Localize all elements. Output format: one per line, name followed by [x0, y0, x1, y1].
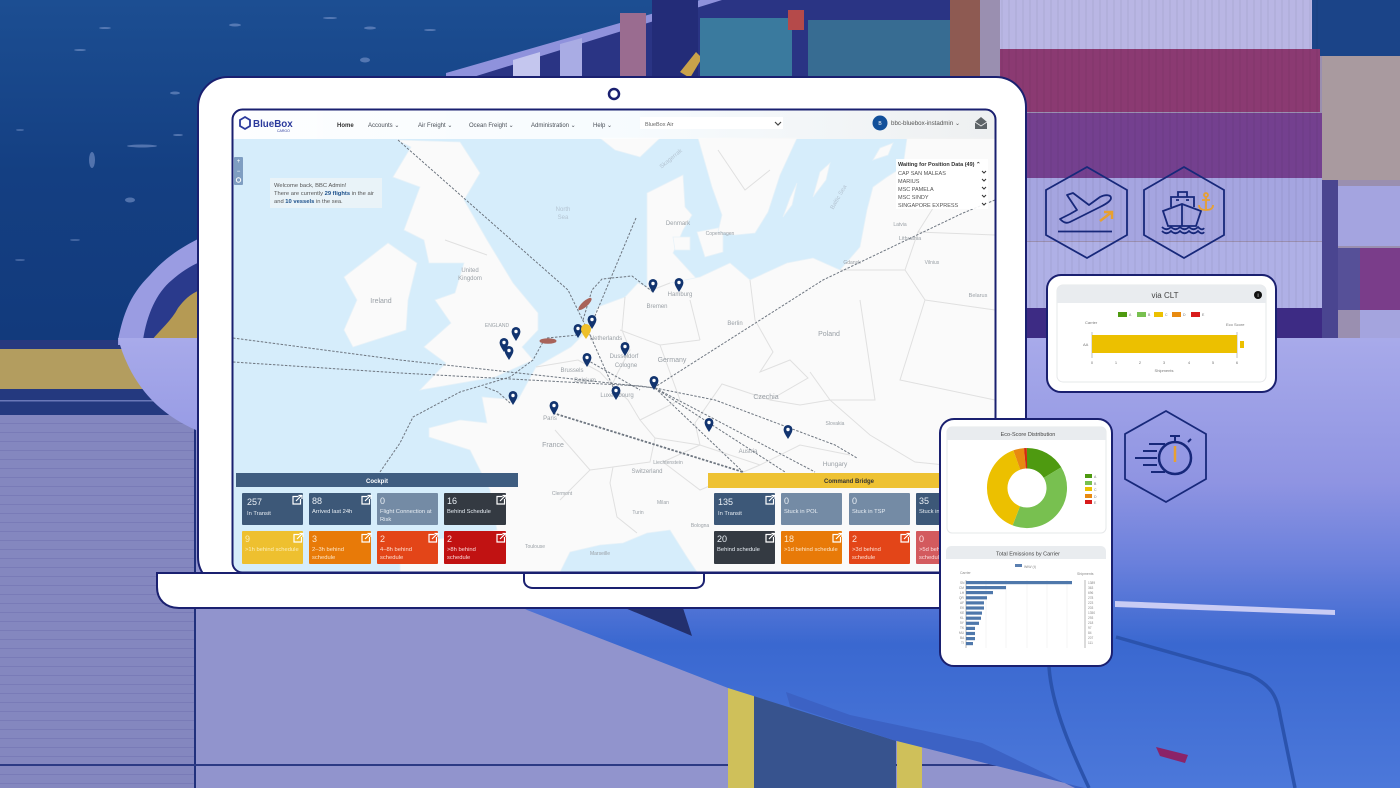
map place labels: Slovakia: [826, 421, 845, 427]
map place labels: Denmark: [666, 221, 691, 227]
donut legend: B: [1094, 482, 1097, 486]
map place labels: Skagerrak: [659, 148, 685, 170]
logo: [240, 117, 293, 133]
waiting list: MARIUS: [898, 179, 920, 185]
cockpit cards: 16: [447, 496, 457, 506]
chart bars and axis: [1083, 320, 1245, 373]
card: tablet with charts: [940, 419, 1112, 666]
emissions bar chart: 278: [1088, 596, 1094, 600]
map place labels: Austria: [739, 449, 758, 455]
cockpit panel: [236, 473, 518, 564]
laptop camera: [609, 89, 619, 99]
donut chart: [997, 458, 1057, 518]
emissions bar chart: 207: [1088, 636, 1094, 640]
map place labels: Baltic Sea: [830, 184, 849, 211]
donut legend: A: [1094, 475, 1097, 479]
emissions bar chart: KL: [960, 616, 964, 620]
cockpit cards: Flight Connection at: [380, 509, 432, 515]
chart legend: A: [1129, 313, 1132, 317]
cockpit cards: 3: [312, 534, 317, 544]
map place labels: Kingdom: [458, 276, 482, 282]
chart header: via CLT: [1152, 291, 1179, 300]
map routes: [233, 140, 995, 472]
chart bars and axis: AA: [1083, 342, 1089, 347]
chart bars and axis: Carrier: [1085, 320, 1098, 325]
menu items: Help ⌄: [593, 123, 612, 129]
chart bars and axis: 4: [1188, 360, 1191, 365]
emissions bar chart: CM: [959, 586, 964, 590]
map place labels: [370, 148, 988, 557]
cockpit cards: >1h behind schedule: [245, 547, 299, 553]
chart bars and axis: Eco Score: [1226, 322, 1245, 327]
command bridge cards: >5d behind: [919, 547, 948, 553]
command bridge cards: 2: [852, 534, 857, 544]
background: dock edge: [0, 340, 200, 416]
command bridge cards: Stuck in TSP: [852, 509, 886, 515]
map place labels: Liechtenstein: [653, 460, 683, 466]
emissions bar chart: WtW (t): [1024, 565, 1036, 569]
cockpit panel: Cockpit: [366, 479, 388, 485]
map place labels: Dusseldorf: [610, 354, 639, 360]
cockpit cards: 9: [245, 534, 250, 544]
zoom controls: +: [237, 159, 241, 165]
menu items: Ocean Freight ⌄: [469, 123, 514, 129]
emissions bar chart: 97: [1088, 626, 1092, 630]
cockpit cards: 257: [247, 497, 262, 507]
cockpit cards: [242, 493, 506, 564]
cockpit cards: 2–3h behind: [312, 547, 344, 553]
map place labels: Luxembourg: [600, 393, 634, 399]
emissions bar chart: 111: [1088, 641, 1093, 645]
cockpit cards: 88: [312, 496, 322, 506]
eco-score distribution panel: Eco-Score Distribution: [1001, 432, 1055, 438]
emissions bar chart: BA: [960, 636, 965, 640]
map place labels: Czechia: [753, 394, 779, 401]
eco-score distribution panel: [947, 427, 1106, 533]
map place labels: Bologna: [691, 523, 709, 529]
command bridge cards: 35: [919, 496, 929, 506]
emissions bar chart: EK: [960, 606, 965, 610]
map place labels: Turin: [632, 510, 644, 516]
donut legend: E: [1094, 501, 1097, 505]
chart legend: D: [1183, 313, 1186, 317]
map place labels: Bremen: [646, 304, 668, 310]
emissions bar chart: Carrier: [960, 571, 972, 575]
map place labels: Latvia: [893, 222, 907, 228]
welcome message: [270, 178, 382, 208]
emissions bar chart: 696: [1088, 591, 1094, 595]
background: left ship hull: [118, 238, 200, 345]
cockpit cards: Behind Schedule: [447, 509, 491, 515]
map place labels: Sea: [558, 215, 569, 221]
waiting list: CAP SAN MALEAS: [898, 171, 946, 177]
map sea: [234, 110, 906, 572]
user menu: bbc-bluebox-instadmin ⌄: [891, 120, 960, 127]
emissions bar chart: KE: [960, 611, 964, 615]
laptop body: [198, 77, 1026, 587]
emissions bar chart: 218: [1088, 621, 1094, 625]
emissions bar chart: 363: [1088, 586, 1094, 590]
donut legend: C: [1094, 488, 1097, 492]
command bridge cards: Stuck in POL: [784, 509, 819, 515]
menu items: Home: [337, 123, 354, 129]
emissions bar chart: TI: [961, 641, 964, 645]
command bridge cards: Behind schedule: [717, 547, 760, 553]
chart header: i: [1257, 293, 1259, 299]
background: sea ripples: [15, 17, 436, 261]
map place labels: Ireland: [370, 298, 392, 305]
emissions bar chart: 5Y: [960, 621, 965, 625]
map place labels: Gdansk: [843, 260, 861, 266]
map place labels: Lithuania: [899, 236, 922, 242]
laptop notch: [524, 573, 704, 588]
background: aircraft fuselage: [118, 338, 1400, 788]
map borders: [445, 150, 995, 533]
map place labels: Hungary: [823, 461, 848, 468]
emissions bar chart: 293: [1088, 616, 1094, 620]
map place labels: North: [556, 207, 570, 213]
map place labels: France: [542, 442, 564, 449]
chart bars and axis: Shipments: [1155, 368, 1173, 373]
map place labels: Brussels: [560, 368, 584, 374]
cockpit cards: 0: [380, 496, 385, 506]
emissions bar chart: LH: [960, 591, 965, 595]
emissions bar chart: SN: [960, 581, 965, 585]
chart bars and axis: 2: [1139, 360, 1142, 365]
emissions bar chart: Shipments: [1077, 572, 1094, 576]
command bridge panel: [708, 473, 956, 564]
map place labels: Belgium: [574, 378, 596, 384]
chart bars and axis: 6: [1236, 360, 1239, 365]
emissions bar chart: 84: [1088, 631, 1092, 635]
emissions bar chart: QR: [959, 596, 964, 600]
chart legend: B: [1148, 313, 1151, 317]
map place labels: Paris: [543, 416, 557, 422]
command bridge cards: In Transit: [718, 511, 742, 517]
menu items: Administration ⌄: [531, 123, 576, 129]
map position pins: [500, 278, 792, 439]
map land: [344, 138, 1000, 572]
welcome message: Welcome back, BBC Admin!: [274, 183, 347, 189]
waiting list: [896, 159, 988, 209]
emissions bar chart: MU: [959, 631, 965, 635]
total emissions header: Total Emissions by Carrier: [996, 552, 1060, 558]
map place labels: Copenhagen: [706, 231, 735, 237]
icon: stopwatch hexagon: [1125, 411, 1206, 502]
cockpit cards: In Transit: [247, 511, 271, 517]
mode selector: [640, 117, 783, 129]
map place labels: Hamburg: [668, 292, 692, 298]
icon: ship hexagon: [1144, 167, 1224, 258]
total emissions header: [946, 546, 1106, 559]
chart legend: C: [1165, 313, 1168, 317]
chart bars and axis: 0: [1091, 360, 1094, 365]
command bridge cards: 135: [718, 497, 733, 507]
map place labels: Milan: [657, 500, 669, 506]
navigation bar: [233, 110, 995, 139]
cockpit cards: schedule: [380, 555, 403, 561]
waiting list: MSC PAMELA: [898, 187, 934, 193]
cockpit cards: >8h behind: [447, 547, 476, 553]
command bridge cards: [714, 493, 956, 564]
map place labels: Germany: [658, 357, 687, 364]
command bridge cards: >3d behind: [852, 547, 881, 553]
welcome message: and 10 vessels in the sea.: [274, 199, 343, 205]
map place labels: United: [461, 268, 479, 274]
emissions bar chart: 223: [1088, 601, 1094, 605]
emissions bar chart: 1389: [1088, 581, 1095, 585]
map place labels: Cologne: [615, 363, 638, 369]
card: via CLT chart: [1047, 275, 1276, 392]
logo: BlueBox: [253, 119, 293, 130]
background: sea: [0, 0, 1000, 345]
zoom controls: [234, 157, 243, 185]
command bridge cards: >1d behind schedule: [784, 547, 838, 553]
map ships: [540, 296, 593, 344]
map place labels: Poland: [818, 331, 840, 338]
laptop base: [157, 573, 1067, 608]
cockpit cards: schedule: [447, 555, 470, 561]
waiting list: SINGAPORE EXPRESS: [898, 203, 959, 209]
map place labels: Belarus: [969, 293, 988, 299]
background: containers: [980, 0, 1400, 345]
zoom controls: −: [237, 169, 241, 175]
welcome message: There are currently 29 flights in the air: [274, 191, 374, 197]
donut legend: [1085, 474, 1097, 505]
donut legend: D: [1094, 495, 1097, 499]
cockpit cards: 2: [447, 534, 452, 544]
background: concrete ground: [0, 415, 1400, 788]
screen frame: [232, 110, 996, 572]
command bridge cards: 0: [784, 496, 789, 506]
cockpit cards: Arrived last 24h: [312, 509, 352, 515]
emissions bar chart: 203: [1088, 606, 1094, 610]
chart bars and axis: 3: [1163, 360, 1166, 365]
command bridge cards: Stuck in: [919, 509, 940, 515]
map place labels: Berlin: [727, 321, 743, 327]
menu items: Accounts ⌄: [368, 123, 399, 129]
map place labels: ENGLAND: [485, 323, 509, 329]
emissions bar chart: TK: [960, 626, 965, 630]
map place labels: Netherlands: [590, 336, 622, 342]
user menu: [872, 116, 960, 130]
map place labels: Clermont: [552, 491, 573, 497]
mail icon: [975, 117, 987, 129]
icon: airplane hexagon: [1046, 167, 1127, 258]
cockpit cards: schedule: [312, 555, 335, 561]
command bridge cards: 20: [717, 534, 727, 544]
command bridge cards: 0: [919, 534, 924, 544]
emissions bar chart: 1350: [1088, 611, 1095, 615]
waiting list: MSC SINDY: [898, 195, 929, 201]
chart bars and axis: 1: [1115, 360, 1118, 365]
menu items: [337, 123, 612, 129]
map place labels: Toulouse: [525, 544, 545, 550]
map place labels: Switzerland: [631, 469, 663, 475]
chart header: [1057, 285, 1266, 303]
cockpit cards: 2: [380, 534, 385, 544]
chart legend: [1118, 312, 1205, 317]
menu items: Air Freight ⌄: [418, 123, 452, 129]
dashboard screen: [233, 110, 1000, 572]
emissions bar chart: [959, 564, 1095, 648]
mode selector: BlueBox Air: [645, 122, 674, 128]
map place labels: Marseille: [590, 551, 610, 557]
chart bars and axis: 5: [1212, 360, 1215, 365]
command bridge panel: Command Bridge: [824, 479, 875, 485]
background: top ship deck: [446, 0, 1000, 80]
command bridge cards: 18: [784, 534, 794, 544]
emissions bar chart: AF: [960, 601, 964, 605]
cockpit cards: 4–8h behind: [380, 547, 412, 553]
chart legend: E: [1202, 313, 1205, 317]
logo: CARGO: [277, 129, 290, 133]
cockpit cards: Risk: [380, 517, 391, 523]
waiting list: Waiting for Position Data (49) ⌃: [898, 161, 981, 168]
command bridge cards: schedule: [919, 555, 942, 561]
map place labels: Vilnius: [925, 260, 940, 266]
user menu: B: [878, 121, 882, 127]
command bridge cards: 0: [852, 496, 857, 506]
command bridge cards: schedule: [852, 555, 875, 561]
